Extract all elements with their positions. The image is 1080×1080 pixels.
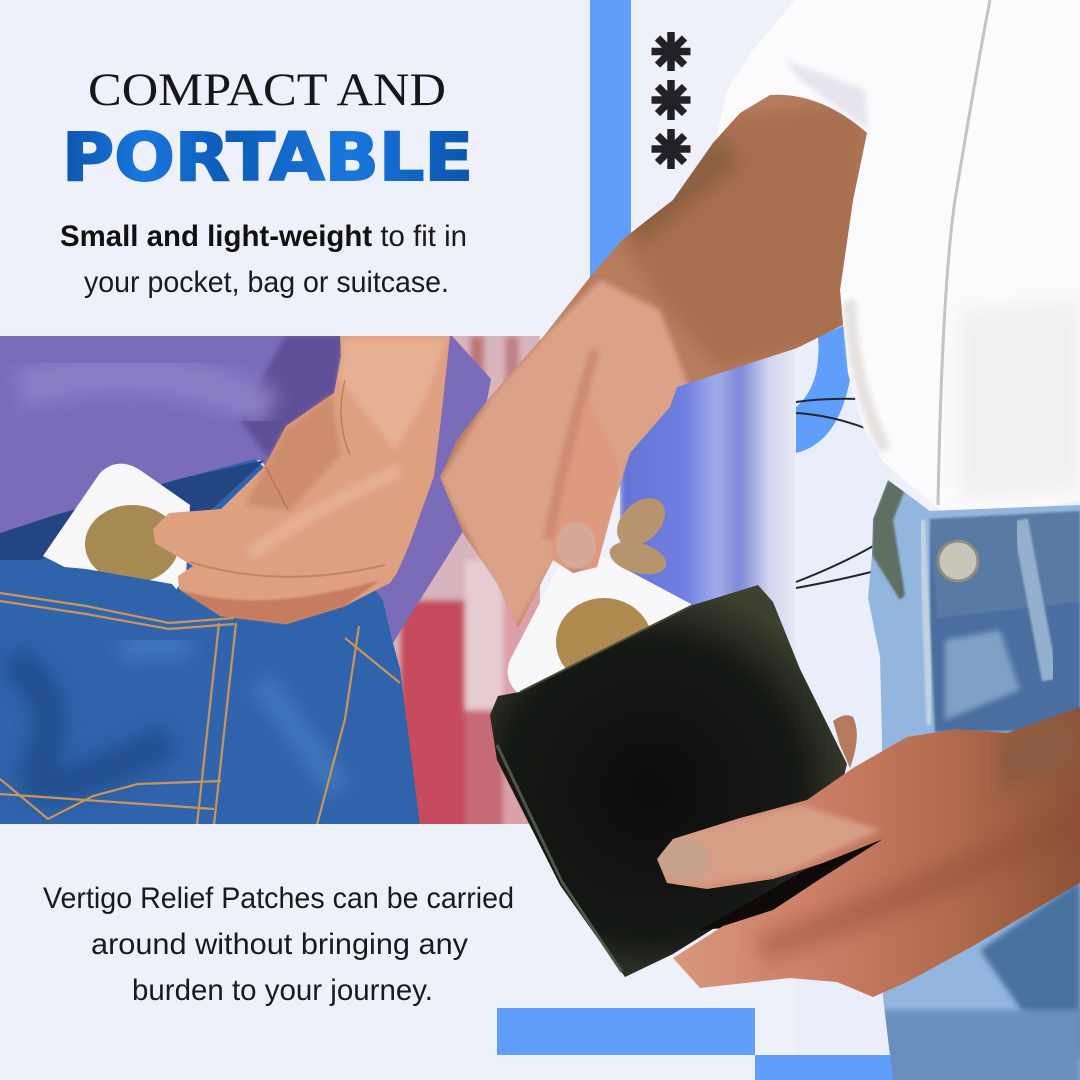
blurred backdrop panel xyxy=(620,325,890,1055)
index finger xyxy=(552,403,618,569)
title: COMPACT AND xyxy=(88,64,446,116)
jeans pocket xyxy=(64,566,190,640)
title: PORTABLE xyxy=(62,119,473,196)
slit between thumb and palm xyxy=(700,839,883,930)
purple shirt xyxy=(0,336,491,643)
patch in wallet xyxy=(508,554,693,695)
man: jeans xyxy=(860,470,1080,1080)
intro text: your pocket, bag or suitcase. xyxy=(84,266,449,299)
icon: asterisks xyxy=(652,32,690,169)
closing text: Vertigo Relief Patches can be carried xyxy=(43,882,514,915)
wallet xyxy=(490,585,883,977)
blue arc xyxy=(796,325,852,453)
closing text: burden to your journey. xyxy=(132,974,433,1007)
photo panel: patch at jeans pocket xyxy=(0,330,550,840)
closing text xyxy=(43,882,514,1007)
man: shirt xyxy=(715,0,1080,515)
hand xyxy=(153,336,450,624)
lower jeans fold xyxy=(980,880,1080,1060)
closing text: around without bringing any xyxy=(91,928,468,961)
man: lower hand xyxy=(650,700,1080,1000)
fingers behind patch xyxy=(606,489,674,580)
jeans button xyxy=(938,541,978,581)
finger nail xyxy=(556,522,596,568)
blurred backdrop xyxy=(382,336,540,824)
title xyxy=(62,64,473,196)
stitching xyxy=(0,593,400,825)
jeans xyxy=(0,459,420,825)
man: upper arm and hand xyxy=(430,90,880,640)
patch xyxy=(43,464,190,590)
upper arm tone xyxy=(620,100,870,370)
blue vertical bar xyxy=(590,0,631,280)
intro text: Small and light-weight to fit in xyxy=(60,220,467,253)
hand tone xyxy=(440,280,690,630)
bottom blue blocks xyxy=(497,1008,893,1080)
intro text xyxy=(60,220,467,299)
fingertip behind wallet xyxy=(833,715,857,768)
